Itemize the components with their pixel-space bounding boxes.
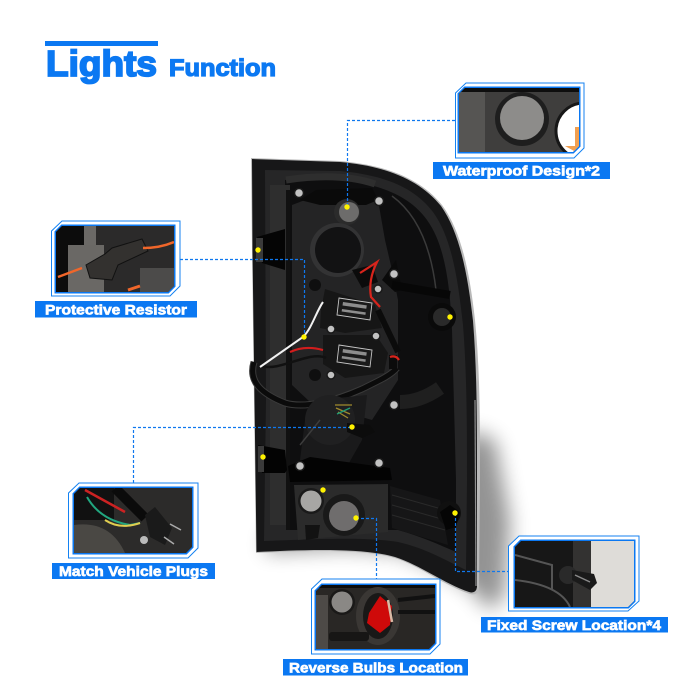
label: Match Vehicle Plugs xyxy=(59,563,208,579)
marker dots xyxy=(255,204,458,521)
leader: vehicle plugs xyxy=(134,428,352,483)
leader: protective resistor xyxy=(180,260,304,337)
callout: fixed screw location xyxy=(481,536,668,633)
title: Function xyxy=(169,55,276,82)
grommet xyxy=(334,199,360,225)
callout: protective resistor xyxy=(35,221,197,318)
left mounting bracket xyxy=(257,229,285,270)
screw clip upper xyxy=(428,303,456,331)
drop shadow xyxy=(265,430,510,610)
connector upper xyxy=(352,265,378,288)
resistor box 1 xyxy=(320,289,382,333)
title xyxy=(45,41,276,84)
lower black bar xyxy=(288,457,392,482)
callout: match vehicle plugs xyxy=(52,483,215,579)
lower compartment xyxy=(294,484,388,540)
grommet lower xyxy=(298,488,324,514)
top moulding xyxy=(286,177,375,184)
inner raised band xyxy=(264,170,467,570)
callout: waterproof design xyxy=(433,83,612,179)
chrome edge xyxy=(475,400,476,586)
inset photo: bulb socket xyxy=(316,585,435,649)
leader: reverse bulbs xyxy=(356,518,376,579)
leader: waterproof xyxy=(348,120,455,206)
inset photo: connector xyxy=(56,226,174,292)
inset photo: plug wires xyxy=(74,488,192,553)
wiring loop xyxy=(253,362,397,405)
reverse bulb socket xyxy=(323,494,365,536)
label: Reverse Bulbs Location xyxy=(289,660,463,676)
outer shell xyxy=(251,158,480,594)
label: Fixed Screw Location*4 xyxy=(487,617,661,633)
callout: reverse bulbs location xyxy=(283,579,468,676)
leader: fixed screw xyxy=(456,513,508,572)
bracket right xyxy=(382,260,402,292)
upper core xyxy=(292,190,398,420)
resistor box 2 xyxy=(323,335,388,378)
bolts xyxy=(294,188,398,470)
resistor label 2 xyxy=(337,345,372,367)
screw clip lower xyxy=(437,501,461,525)
resistor label 1 xyxy=(337,298,372,320)
label: Waterproof Design*2 xyxy=(443,162,600,178)
round cap xyxy=(310,223,364,277)
glossy arc xyxy=(392,196,436,290)
inset photo: screw xyxy=(515,541,634,607)
label: Protective Resistor xyxy=(45,302,188,318)
tail light housing xyxy=(251,158,510,610)
red upper wires xyxy=(360,262,380,307)
lower socket area xyxy=(300,395,367,470)
title: Lights xyxy=(46,43,157,84)
left light band xyxy=(270,185,290,525)
lower left mounting bracket xyxy=(258,445,287,473)
inset photo: grommet xyxy=(459,88,579,152)
